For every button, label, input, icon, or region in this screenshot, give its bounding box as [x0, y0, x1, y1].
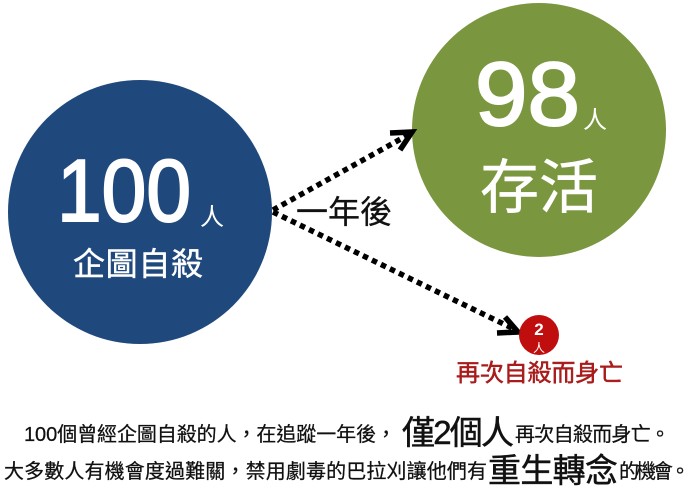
circle: 98 people survived: 存活: [480, 155, 598, 221]
text: summary line two: 重生轉念: [488, 452, 618, 489]
arrow: to deaths: [273, 212, 518, 333]
arrow: to survivors: [273, 132, 412, 210]
text: summary line two: 大多數人有機會度過難關，禁用劇毒的巴拉刈讓他們有: [4, 460, 487, 483]
text: summary line two: 的機會。: [619, 460, 690, 483]
text: summary line one: 100個曾經企圖自殺的人，在追蹤一年後，: [24, 423, 396, 446]
circle: 98 people survived: 人: [583, 107, 607, 134]
text: summary line one: 再次自殺而身亡。: [515, 423, 670, 446]
label: died by suicide again: 再次自殺而身亡: [456, 360, 623, 387]
circle: 2 people: 2: [534, 320, 544, 339]
text: summary line one: 僅2個人: [402, 414, 514, 451]
text: summary line one: [24, 414, 670, 451]
circle: 100 people attempted suicide: [8, 80, 272, 344]
circle: 98 people survived: [412, 3, 666, 257]
circle: 2 people: [519, 315, 559, 355]
circle: 98 people survived: 98: [475, 45, 580, 145]
circle: 100 people attempted suicide: 人: [200, 204, 224, 231]
label: one year later: 一年後: [296, 194, 392, 230]
circle: 100 people attempted suicide: 企圖自殺: [73, 246, 203, 282]
circle: 2 people: 人: [533, 341, 545, 355]
circle: 100 people attempted suicide: 100: [57, 141, 191, 240]
text: summary line two: [4, 452, 690, 489]
